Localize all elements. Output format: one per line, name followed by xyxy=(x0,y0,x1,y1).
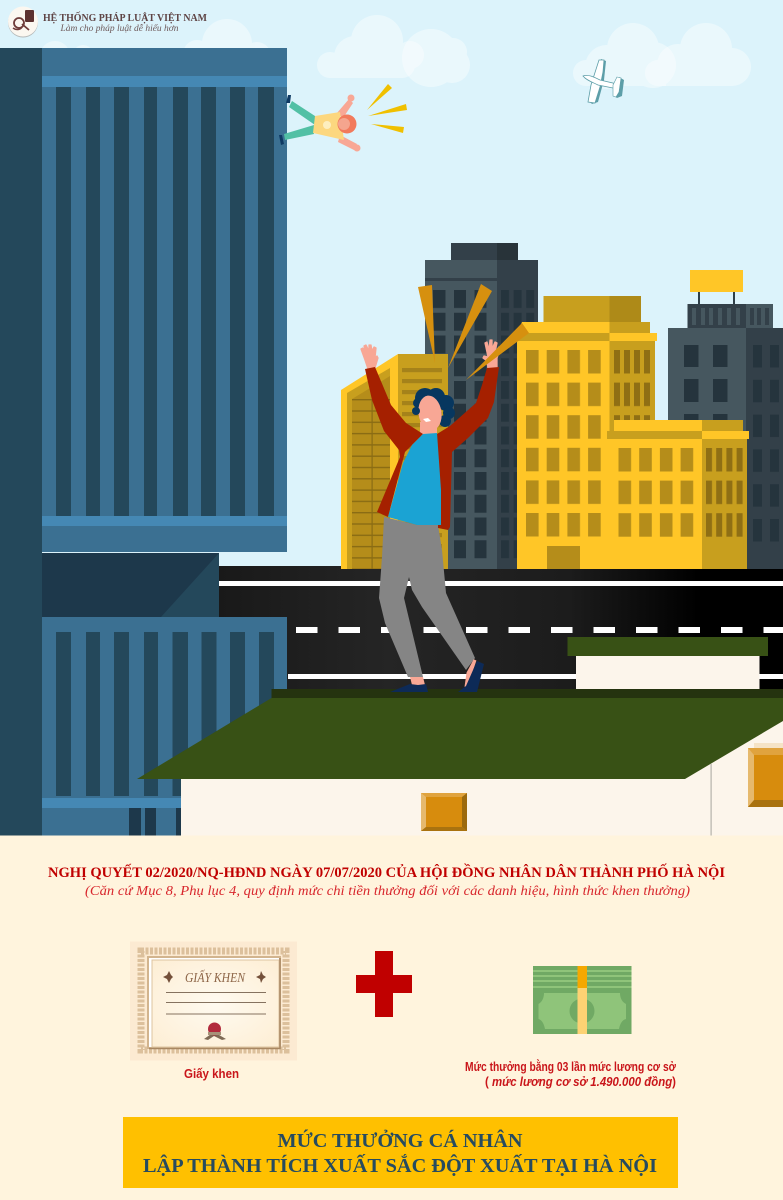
site name xyxy=(43,11,207,34)
certificate ornaments xyxy=(163,971,266,983)
label: certificate: Giấy khen xyxy=(184,1066,239,1081)
cloud: upper centre right xyxy=(402,29,470,87)
certificate xyxy=(130,942,297,1060)
label: reward amount: ( mức lương cơ sở 1.490.000 đồng) xyxy=(485,1074,676,1089)
surprise rays: main person xyxy=(418,284,529,380)
window: centre xyxy=(421,793,467,831)
heading: resolution xyxy=(48,863,725,899)
yellow building left xyxy=(341,354,448,569)
certificate seal xyxy=(204,1022,226,1040)
grey building centre xyxy=(425,243,538,569)
money icon xyxy=(533,966,632,1034)
feet xyxy=(390,660,484,692)
certificate title: GIẤY KHEN xyxy=(185,969,246,986)
clouds xyxy=(40,15,751,89)
cloud: upper right first xyxy=(573,23,676,89)
yellow building large xyxy=(517,296,657,569)
heading: resolution: NGHỊ QUYẾT 02/2020/NQ-HĐND NGÀY 07/07/2020 CỦA HỘI ĐỒNG NHÂN DÂN THÀNH PHỐ HÀ NỘI xyxy=(48,863,725,881)
certificate lines xyxy=(166,992,266,1014)
cloud: upper right second xyxy=(645,23,751,86)
lower cream panel xyxy=(0,836,783,1200)
heading: resolution: (Căn cứ Mục 8, Phụ lục 4, quy định mức chi tiền thưởng đối với các danh hiệu, hình thức khen thưởng) xyxy=(85,884,690,899)
jacket xyxy=(365,367,499,530)
shirt xyxy=(388,433,441,525)
banner: title: MỨC THƯỞNG CÁ NHÂN xyxy=(278,1128,523,1152)
site name: HỆ THỐNG PHÁP LUẬT VIỆT NAM xyxy=(43,11,207,24)
head xyxy=(338,114,356,134)
cloud: behind header centre xyxy=(183,19,271,70)
pants xyxy=(379,517,475,677)
falling person xyxy=(279,94,360,152)
label: reward amount xyxy=(465,1059,677,1089)
grey building right xyxy=(668,270,783,569)
main person xyxy=(361,340,500,692)
site name: Làm cho pháp luật dễ hiểu hơn xyxy=(60,23,179,34)
yellow building lower xyxy=(607,420,749,569)
hands xyxy=(361,340,500,369)
neck xyxy=(420,422,437,436)
banner: title: LẬP THÀNH TÍCH XUẤT SẮC ĐỘT XUẤT TẠI HÀ NỘI xyxy=(143,1153,657,1177)
sky background xyxy=(0,0,783,836)
arms xyxy=(337,99,357,150)
roof xyxy=(137,689,783,779)
window: right xyxy=(748,743,783,807)
airplane xyxy=(583,59,624,104)
label: reward amount: Mức thưởng bằng 03 lần mức lương cơ sở xyxy=(465,1059,677,1074)
foreground house xyxy=(137,689,783,836)
blue tower xyxy=(0,48,287,836)
house wall xyxy=(181,717,783,836)
torso xyxy=(313,112,344,140)
legs xyxy=(284,101,315,140)
road xyxy=(219,566,783,690)
head xyxy=(412,388,455,432)
plus sign xyxy=(356,951,412,1017)
shoes xyxy=(279,95,291,145)
cloud: upper centre left xyxy=(317,15,424,78)
banner: title xyxy=(123,1117,678,1188)
logo xyxy=(8,6,38,38)
rooftop sign xyxy=(690,270,743,305)
cloud: behind header left xyxy=(40,41,93,71)
surprise rays: falling person xyxy=(367,84,407,133)
small house behind xyxy=(568,637,768,689)
